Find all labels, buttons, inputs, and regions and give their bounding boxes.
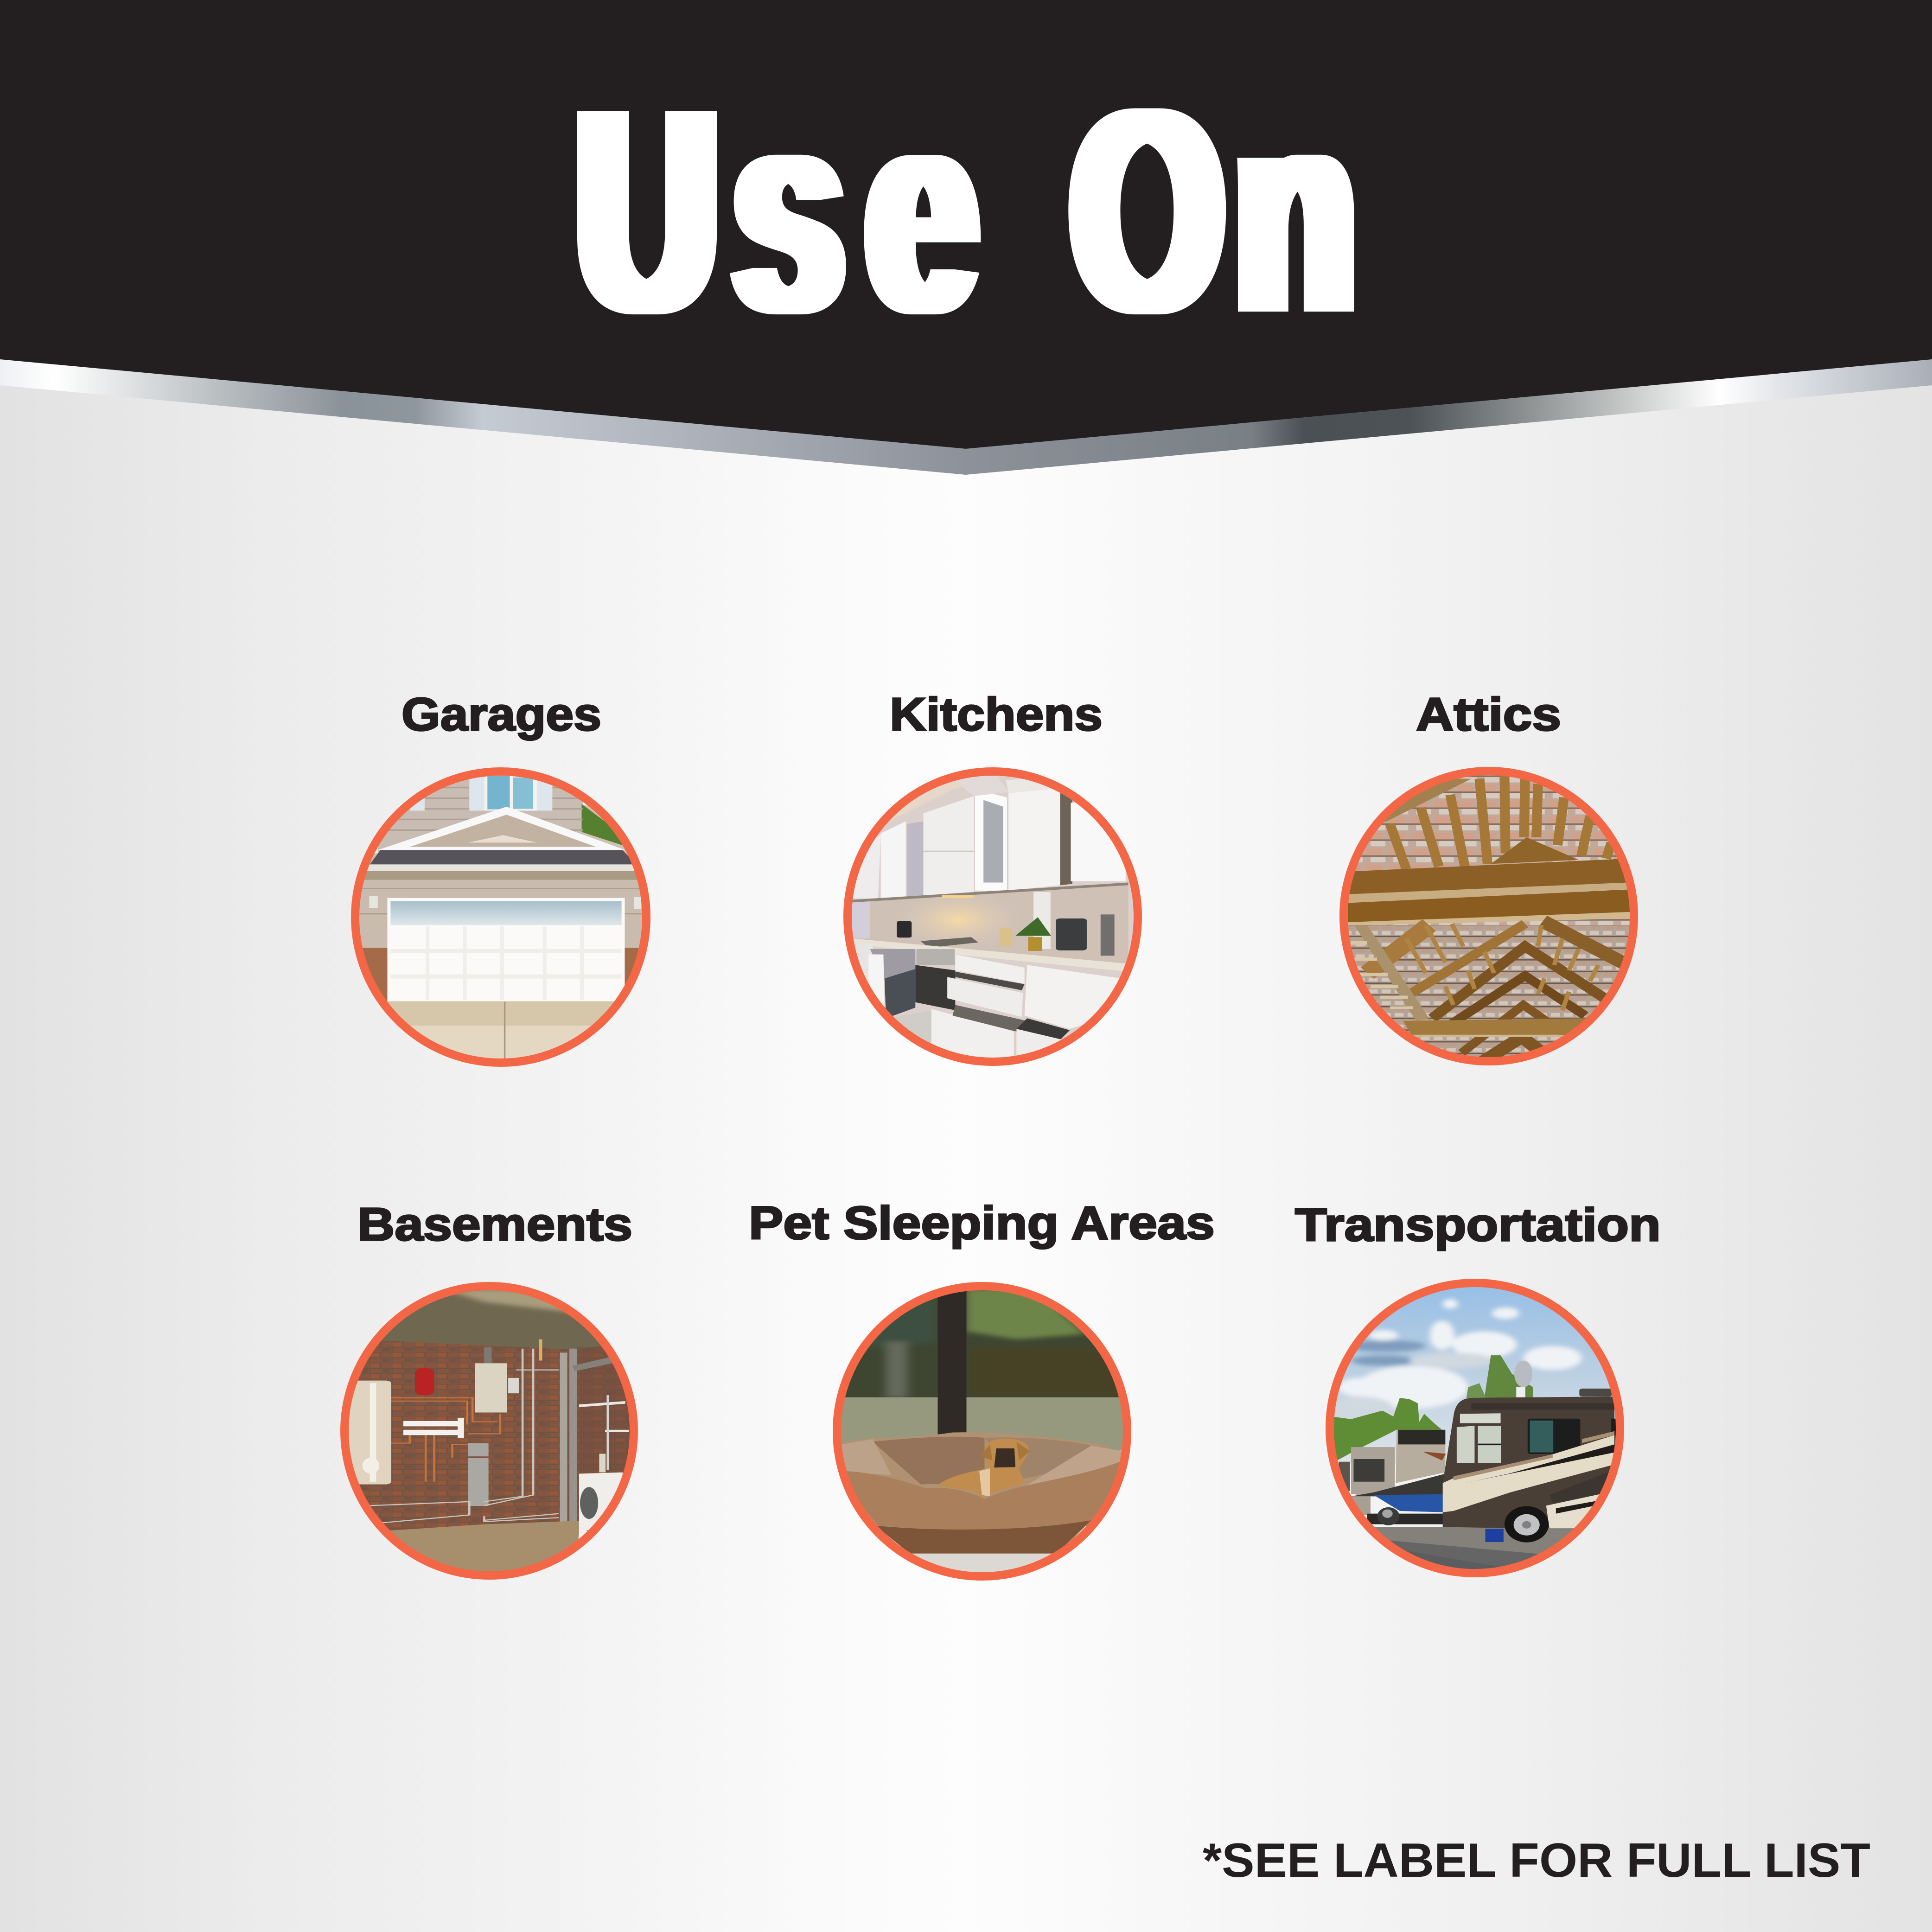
ring (355, 772, 646, 1063)
photo: garage door (359, 776, 642, 1058)
heading: attics: Attics (1416, 689, 1561, 740)
photo: basement utility room (335, 1283, 644, 1579)
ring (1344, 771, 1634, 1061)
metallic chevron band (0, 359, 1932, 475)
panel: kitchens (841, 689, 1144, 1069)
heading: basements: Basements (357, 1199, 632, 1250)
photo: dog in bed (830, 1281, 1134, 1579)
ring (344, 1286, 634, 1575)
panel: pet sleeping areas (749, 1197, 1215, 1579)
panel: transportation (1295, 1199, 1661, 1580)
panel: basements (335, 1199, 644, 1579)
photo: attic roof beams (1348, 775, 1630, 1057)
heading: kitchens: Kitchens (890, 689, 1103, 740)
ring (848, 772, 1138, 1062)
header banner (0, 0, 1932, 475)
heading: pet sleeping areas: Pet Sleeping Areas (749, 1197, 1215, 1249)
heading: garages: Garages (402, 689, 601, 740)
black header shape (0, 0, 1932, 449)
panel: garages (346, 689, 655, 1071)
photo: RVs parked (1322, 1278, 1627, 1580)
title: Use On (578, 48, 1354, 373)
footnote: *SEE LABEL FOR FULL LIST (1203, 1834, 1870, 1887)
heading: transportation: Transportation (1295, 1199, 1661, 1251)
ring (837, 1286, 1127, 1576)
ring (1330, 1283, 1620, 1573)
photo: kitchen (852, 776, 1134, 1058)
panel: attics (1335, 689, 1644, 1069)
